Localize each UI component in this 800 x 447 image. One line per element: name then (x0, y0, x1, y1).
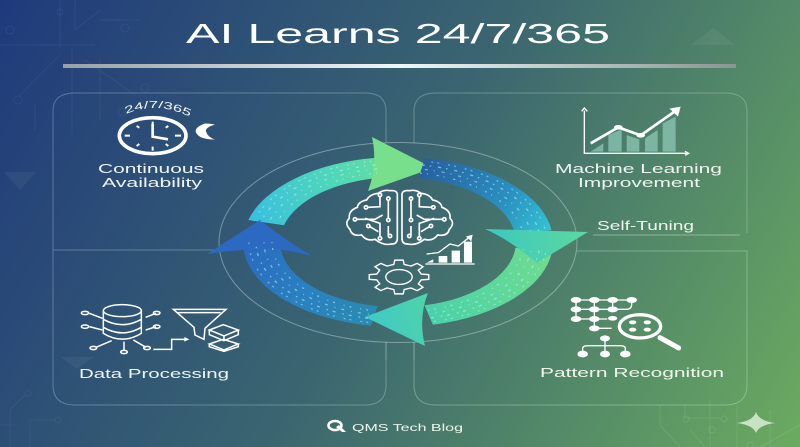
panel outline (53, 93, 386, 250)
label: machine learning improvement: Machine Learning (555, 162, 722, 176)
panel: machine learning improvement (414, 93, 747, 235)
panel outline (414, 93, 747, 233)
decorative circuit bottom-left (0, 390, 61, 447)
arrow head: bottom teal (365, 293, 428, 346)
brain left lobe (347, 190, 397, 244)
icon: growth chart (582, 107, 689, 155)
label: continuous availability: Continuous (98, 162, 204, 176)
footer logo (328, 421, 463, 434)
icon: Q logo (328, 421, 346, 432)
data particle streams (249, 160, 547, 324)
outer ring (219, 142, 577, 342)
footer text: QMS Tech Blog (352, 422, 463, 434)
panel: continuous availability (52, 92, 386, 250)
label: machine learning improvement (555, 162, 722, 190)
panel outline (414, 251, 747, 405)
self-tuning underline (593, 234, 740, 236)
icon: clock (119, 118, 186, 154)
decorative circuit bottom-right (660, 400, 800, 447)
icon: center bar chart (425, 235, 475, 264)
label: data processing: Data Processing (79, 367, 229, 381)
panel outline (53, 250, 386, 405)
panel: pattern recognition (414, 251, 747, 405)
cycle arrows (207, 137, 588, 346)
title rule (63, 64, 736, 68)
icon: moon (196, 124, 215, 140)
arrow: top green (248, 137, 433, 225)
arrow: lower right green (424, 229, 588, 325)
decorative triangles (4, 28, 735, 369)
decorative circuit top-left (0, 0, 149, 135)
panel: data processing (53, 250, 386, 405)
arrow: lower left blue (207, 220, 378, 326)
label: pattern recognition: Pattern Recognition (540, 366, 724, 380)
icon: brain (347, 190, 452, 244)
title: AI Learns 24/7/365 (186, 18, 610, 49)
label: continuous availability (98, 162, 204, 190)
divider connectors (386, 342, 414, 360)
label: continuous availability: Availability (102, 176, 203, 190)
icon: pattern and magnifier (571, 297, 679, 357)
arrow: right blue to teal (418, 158, 552, 233)
clock caption 24/7/365: 24/7/365 (125, 100, 192, 116)
icon: database and funnel (81, 305, 238, 354)
brain right lobe (402, 190, 452, 244)
label: machine learning improvement: Improvement (578, 176, 701, 190)
label: self-tuning: Self-Tuning (597, 219, 694, 233)
icon: gear (369, 260, 429, 294)
icon: sparkle (737, 412, 775, 433)
